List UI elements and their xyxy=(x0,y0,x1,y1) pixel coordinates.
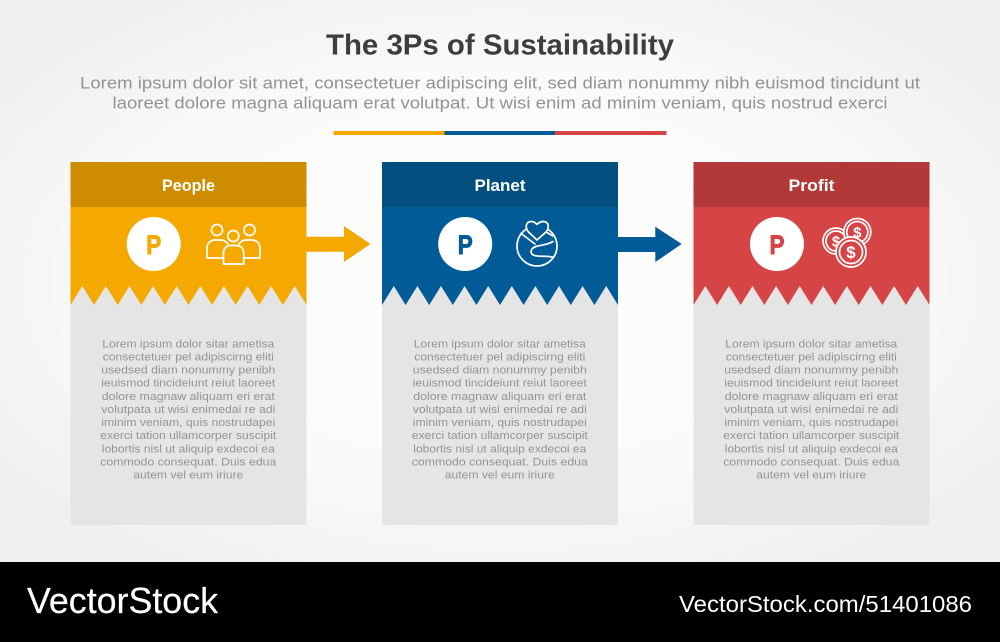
profit heading: Profit xyxy=(788,176,835,195)
panel: planet xyxy=(382,162,618,525)
profit body text: volutpata ut wisi enimedai re adi xyxy=(724,404,898,416)
icon: coins: $ xyxy=(853,224,862,242)
planet body text: lobortis nisl ut aliquip exdecoi ea xyxy=(413,443,587,455)
tricolour divider xyxy=(334,131,666,135)
subtitle text xyxy=(80,74,920,112)
profit coloured band with zigzag edge xyxy=(694,207,930,305)
profit body text: iminim veniam, quis nostrudapei xyxy=(724,417,898,429)
profit P badge xyxy=(750,217,804,271)
profit body text: lobortis nisl ut aliquip exdecoi ea xyxy=(725,443,899,455)
footer image id: VectorStock.com/51401086 xyxy=(679,591,972,617)
planet coloured band with zigzag edge xyxy=(382,207,618,305)
people P badge xyxy=(127,217,181,271)
arrow: people to planet xyxy=(306,226,370,262)
planet heading: Planet xyxy=(474,176,526,195)
profit body text: dolore magnaw aliquam eri erat xyxy=(725,391,898,403)
people body text: exerci tation ullamcorper suscipit xyxy=(100,430,276,442)
people header bar xyxy=(70,162,306,207)
people body text: usedsed diam nonummy penibh xyxy=(101,364,275,376)
planet body text: exerci tation ullamcorper suscipit xyxy=(412,430,588,442)
people body text xyxy=(100,338,277,482)
people coloured band with zigzag edge xyxy=(70,207,306,305)
subtitle text: laoreet dolore magna aliquam erat volutpat. Ut wisi enim ad minim veniam, quis nostrud exerci xyxy=(112,94,888,112)
icon: coins xyxy=(823,218,871,267)
profit body text: autem vel eum iriure xyxy=(756,470,866,482)
people body text: commodo consequat. Duis edua xyxy=(100,456,277,468)
people body text: autem vel eum iriure xyxy=(133,470,243,482)
profit body text: consectetuer pel adipiscirng eliti xyxy=(726,351,897,363)
planet body text: ieuismod tincideiunt reiut laoreet xyxy=(413,378,587,390)
icon: coins: $ xyxy=(832,234,841,250)
planet body text: consectetuer pel adipiscirng eliti xyxy=(414,351,585,363)
planet P badge xyxy=(438,217,492,271)
arrow: planet to profit xyxy=(618,227,682,262)
people P badge: P xyxy=(146,230,161,260)
panel: people xyxy=(70,162,306,525)
planet body text: Lorem ipsum dolor sitar ametisa xyxy=(414,338,587,350)
profit body text: Lorem ipsum dolor sitar ametisa xyxy=(725,338,898,350)
planet body text: volutpata ut wisi enimedai re adi xyxy=(413,404,587,416)
footer brand name: VectorStock xyxy=(27,580,219,621)
profit body text: commodo consequat. Duis edua xyxy=(723,456,900,468)
profit body text: usedsed diam nonummy penibh xyxy=(724,364,898,376)
people body text: dolore magnaw aliquam eri erat xyxy=(102,391,275,403)
people body text: volutpata ut wisi enimedai re adi xyxy=(101,404,275,416)
planet body text xyxy=(412,338,589,482)
profit body text xyxy=(723,338,900,482)
people body text: ieuismod tincideiunt reiut laoreet xyxy=(101,378,275,390)
planet body text: usedsed diam nonummy penibh xyxy=(413,364,587,376)
footer band xyxy=(0,562,1000,642)
planet body text: autem vel eum iriure xyxy=(445,470,555,482)
people body text: consectetuer pel adipiscirng eliti xyxy=(103,351,274,363)
icon: group of people xyxy=(207,224,260,264)
icon: coins: $ xyxy=(846,243,856,262)
people body text: Lorem ipsum dolor sitar ametisa xyxy=(102,338,275,350)
planet P badge: P xyxy=(458,230,473,260)
planet header bar xyxy=(382,162,618,207)
people heading: People xyxy=(162,176,215,195)
title: The 3Ps of Sustainability xyxy=(326,30,674,62)
panel: profit xyxy=(694,162,930,525)
people body text: iminim veniam, quis nostrudapei xyxy=(101,417,275,429)
profit body text: exerci tation ullamcorper suscipit xyxy=(723,430,899,442)
planet body text: iminim veniam, quis nostrudapei xyxy=(413,417,587,429)
icon: globe with heart xyxy=(517,222,557,266)
subtitle text: Lorem ipsum dolor sit amet, consectetuer adipiscing elit, sed diam nonummy nibh euismod tincidunt ut xyxy=(80,74,920,92)
people body text: lobortis nisl ut aliquip exdecoi ea xyxy=(102,443,276,455)
planet body text: dolore magnaw aliquam eri erat xyxy=(413,391,586,403)
profit body text: ieuismod tincideiunt reiut laoreet xyxy=(724,378,898,390)
planet body text: commodo consequat. Duis edua xyxy=(412,456,589,468)
profit header bar xyxy=(694,162,930,207)
profit P badge: P xyxy=(770,230,784,260)
